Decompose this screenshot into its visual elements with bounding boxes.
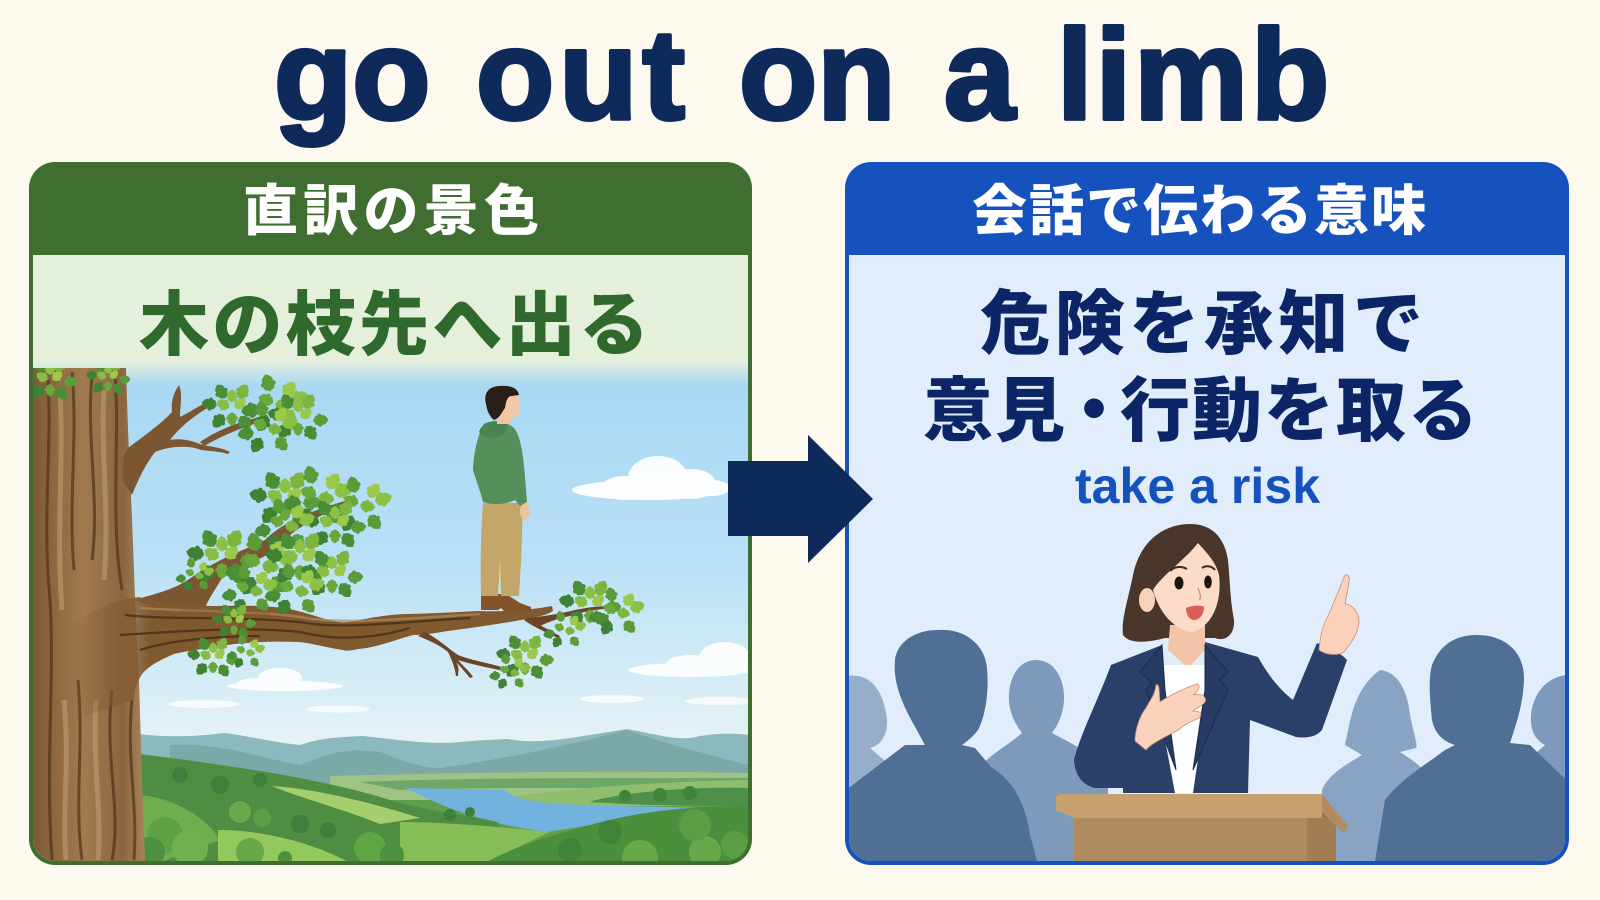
panel frame: green	[29, 162, 752, 865]
jacket	[1074, 642, 1347, 793]
cloud: right large	[572, 456, 730, 500]
near right forest	[480, 806, 748, 865]
far audience right	[1530, 675, 1565, 779]
far woods band	[360, 778, 748, 790]
speaker	[1074, 524, 1359, 793]
far audience left	[849, 676, 888, 788]
hair back	[1123, 524, 1234, 642]
lectern	[1056, 794, 1348, 861]
title: on	[739, 4, 895, 147]
front audience right man	[1375, 635, 1566, 861]
leaf clusters	[175, 372, 647, 691]
meaning line 2: ・	[1059, 372, 1129, 450]
middle branch	[135, 500, 349, 610]
neck	[1168, 625, 1205, 668]
boots	[481, 594, 531, 612]
raised hand	[1319, 575, 1359, 654]
header label: 会話で伝わる意味	[972, 180, 1426, 242]
hair	[485, 386, 519, 420]
hoodie	[473, 421, 527, 506]
meaning line 1: 危険を承知で	[980, 285, 1423, 363]
tree clumps	[144, 767, 748, 861]
hillside forest	[141, 754, 515, 861]
subtitle band and sky	[33, 255, 748, 861]
neck and face	[497, 416, 511, 424]
ear	[1139, 588, 1155, 612]
title: go	[274, 4, 430, 147]
meaning line 2: 行動を取る	[1120, 372, 1480, 450]
eyes, brows, nose	[1170, 566, 1215, 600]
title: out	[476, 4, 690, 147]
mid audience right woman	[1322, 670, 1432, 861]
man standing on limb	[473, 386, 531, 612]
meaning line 2: 意見	[923, 372, 1067, 450]
cloud: lower right	[628, 642, 752, 677]
base greenery	[390, 800, 748, 861]
mountains	[140, 729, 748, 784]
shirt	[1163, 665, 1205, 793]
hillside meadow strip	[272, 786, 420, 824]
trousers	[481, 503, 522, 596]
upper branch	[122, 385, 266, 495]
panel frame: blue	[845, 162, 1569, 865]
clouds: thin streaks	[168, 695, 757, 712]
header label: 直訳の景色	[243, 180, 539, 242]
panel body	[849, 255, 1565, 861]
literal phrase: 木の枝先へ出る	[139, 286, 649, 364]
title: a	[944, 4, 1016, 147]
cloud: lower centre	[227, 668, 343, 691]
main limb	[92, 597, 604, 712]
english gloss: take a risk	[1075, 458, 1320, 514]
illustration: tree and landscape	[21, 355, 757, 876]
title: limb	[1057, 4, 1332, 147]
arrow	[728, 435, 873, 563]
trunk-top leaves	[33, 368, 130, 400]
face	[1153, 543, 1220, 632]
mouth	[1186, 606, 1204, 620]
forest far right shore	[507, 780, 748, 806]
illustration: speaker and audience	[846, 524, 1566, 861]
front audience left man	[846, 630, 1037, 861]
hand on chest	[1135, 684, 1206, 750]
mid audience left	[982, 660, 1108, 861]
far fields	[330, 772, 748, 800]
tree trunk	[33, 368, 145, 861]
panel: conversational meaning	[845, 162, 1569, 865]
lake	[405, 788, 700, 832]
hand	[520, 502, 530, 520]
panel: literal scene	[21, 162, 757, 876]
near meadows	[142, 795, 218, 861]
lapels	[1140, 645, 1228, 770]
